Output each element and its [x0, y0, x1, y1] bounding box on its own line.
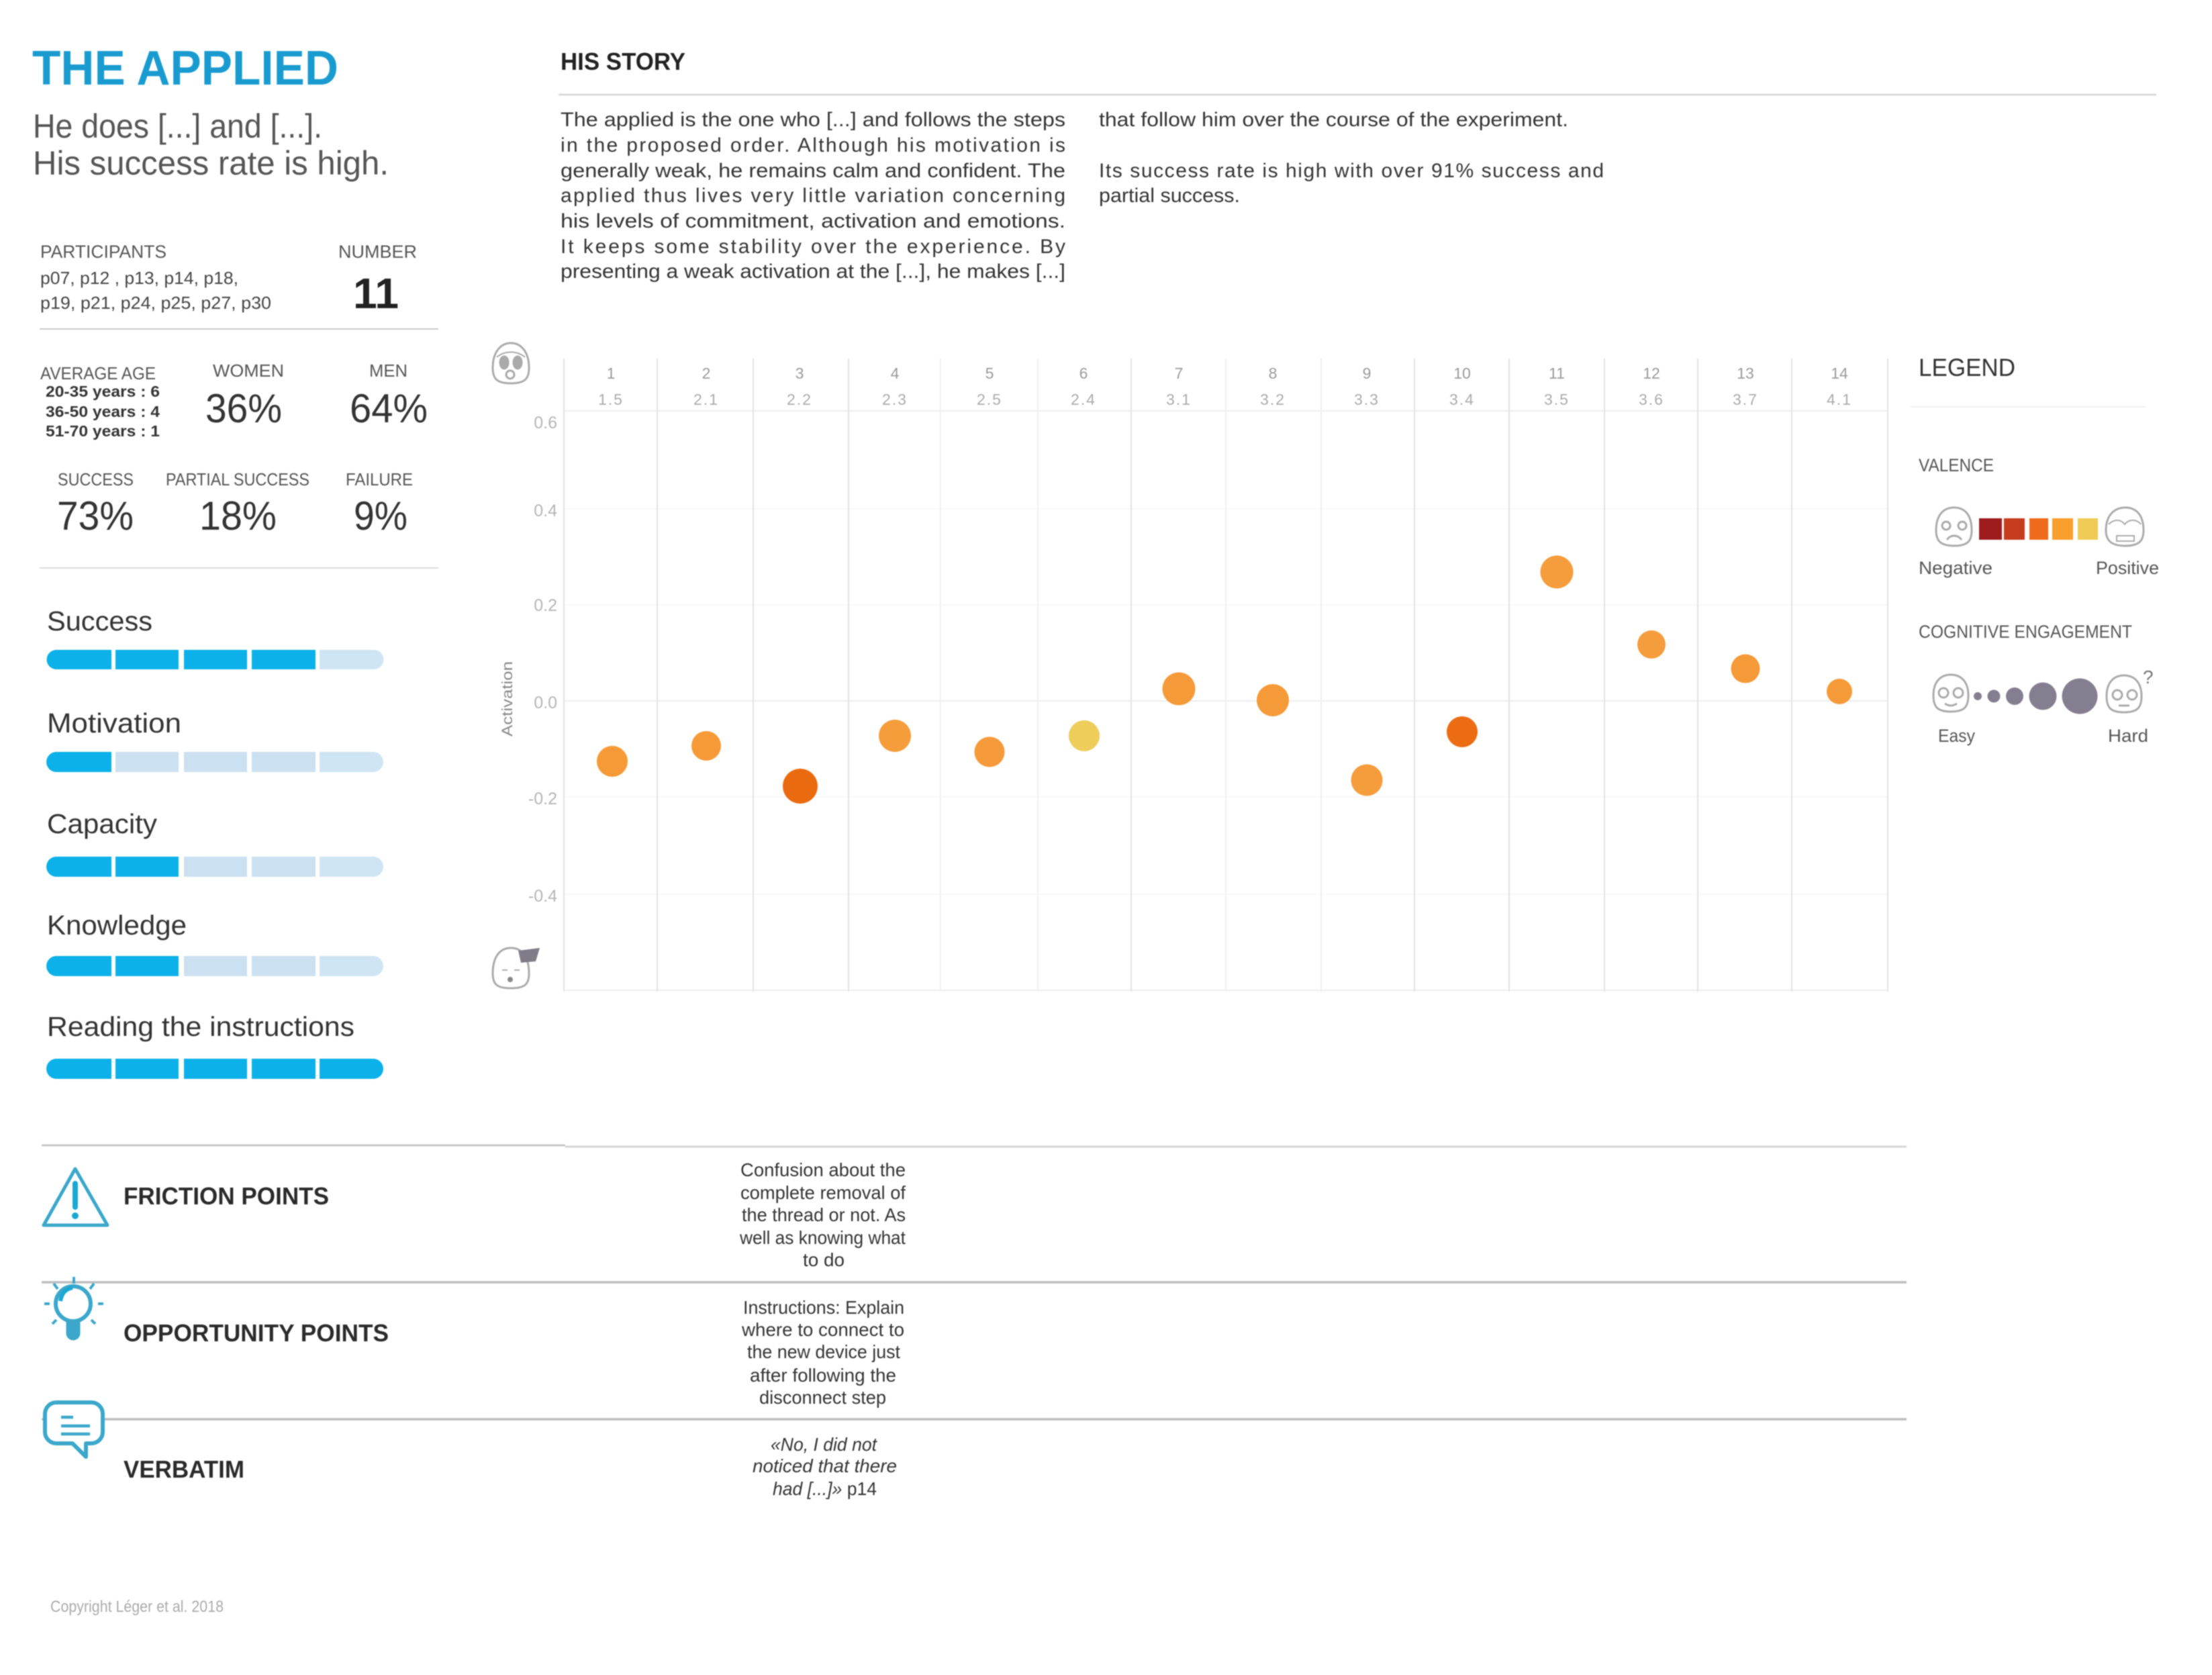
negative label: Negative — [1919, 558, 1992, 578]
step code labels: 4.1 — [1827, 391, 1852, 408]
bar: reading the instructions — [46, 1011, 383, 1079]
opportunity points heading: OPPORTUNITY POINTS — [124, 1319, 389, 1347]
step code labels: 2.1 — [693, 391, 719, 408]
friction points heading: FRICTION POINTS — [124, 1182, 329, 1210]
failure share: 9% — [354, 493, 407, 538]
bar: success — [47, 606, 384, 669]
step number labels: 7 — [1175, 365, 1183, 382]
copyright: Copyright Léger et al. 2018 — [50, 1598, 224, 1616]
text block: story: in the proposed order. Although his motivation is — [561, 134, 1065, 156]
y axis title: Activation — [499, 661, 516, 736]
step code labels: 2.4 — [1071, 391, 1096, 408]
icon: hard face: ? — [2143, 667, 2154, 687]
bar: motivation: Motivation — [47, 708, 181, 738]
y axis ticks: -0.2 — [528, 789, 557, 808]
step code labels: 2.3 — [882, 391, 908, 408]
panel: demographics — [40, 361, 428, 538]
data points — [597, 556, 1852, 804]
success share: SUCCESS — [58, 469, 134, 489]
opportunity points text: where to connect to — [741, 1319, 904, 1340]
friction points text: the thread or not. As — [742, 1204, 906, 1225]
participants list: p19, p21, p24, p25, p27, p30 — [40, 293, 271, 313]
icon: light bulb — [44, 1277, 103, 1339]
icon: warning triangle — [44, 1169, 107, 1225]
step code labels — [598, 391, 1852, 408]
bar: capacity: Capacity — [47, 808, 158, 839]
easy label: Easy — [1938, 726, 1975, 746]
icon: negative face — [1936, 508, 1972, 546]
heading: his story: HIS STORY — [561, 48, 685, 75]
text block: story: his levels of commitment, activation and emotions. — [561, 210, 1065, 232]
step number labels: 2 — [702, 365, 710, 382]
icon: excited face — [493, 343, 529, 383]
bar: knowledge — [46, 910, 383, 976]
friction points text: complete removal of — [740, 1182, 906, 1203]
participants list: p07, p12 , p13, p14, p18, — [40, 268, 238, 288]
step number labels: 4 — [891, 365, 900, 382]
icon: easy face — [1933, 675, 1968, 712]
success share: 73% — [57, 493, 134, 538]
partial success share: 18% — [199, 493, 277, 538]
step number labels: 6 — [1079, 365, 1088, 382]
icon: sleepy face — [493, 948, 540, 988]
row: verbatim — [45, 1402, 897, 1499]
failure share — [346, 469, 413, 538]
friction points text — [739, 1159, 906, 1270]
step code labels: 3.5 — [1544, 391, 1570, 408]
text block: story: partial success. — [1099, 185, 1240, 207]
friction points text: Confusion about the — [740, 1159, 906, 1180]
bar: capacity — [46, 808, 383, 877]
partial success share: PARTIAL SUCCESS — [166, 469, 309, 489]
text block: story: It keeps some stability over the experience. By — [561, 236, 1065, 258]
verbatim heading: VERBATIM — [124, 1455, 244, 1483]
valence scale — [1979, 518, 2098, 540]
step code labels: 3.7 — [1733, 391, 1758, 408]
y axis ticks — [528, 414, 557, 906]
legend heading: LEGEND — [1919, 354, 2015, 381]
age breakdown: 51-70 years : 1 — [46, 422, 160, 440]
women share — [205, 361, 284, 431]
opportunity points text: disconnect step — [759, 1387, 886, 1408]
chart: activation dot plot — [493, 343, 1888, 992]
women share: WOMEN — [213, 361, 284, 381]
text block: story: applied thus lives very little variation concerning — [561, 185, 1065, 207]
step code labels: 3.3 — [1354, 391, 1380, 408]
men share: 64% — [350, 386, 428, 431]
step code labels: 3.2 — [1260, 391, 1286, 408]
participants heading: PARTICIPANTS — [40, 242, 166, 262]
step code labels: 3.1 — [1166, 391, 1192, 408]
hard label: Hard — [2108, 726, 2148, 746]
valence heading: VALENCE — [1919, 455, 1994, 475]
step number labels: 5 — [985, 365, 994, 382]
text block: story — [561, 109, 1604, 283]
women share: 36% — [205, 386, 282, 431]
y axis ticks: 0.4 — [534, 501, 557, 520]
men share — [350, 361, 428, 431]
subtitle: His success rate is high. — [33, 144, 389, 182]
step code labels: 3.4 — [1449, 391, 1475, 408]
step code labels: 1.5 — [598, 391, 624, 408]
title: THE APPLIED — [32, 42, 338, 95]
step number labels: 11 — [1549, 365, 1565, 382]
verbatim quote: had [...]» p14 — [773, 1478, 877, 1499]
bar: reading the instructions: Reading the instructions — [47, 1011, 354, 1042]
opportunity points text: the new device just — [747, 1341, 900, 1362]
step number labels: 14 — [1831, 365, 1848, 382]
cognitive engagement heading: COGNITIVE ENGAGEMENT — [1919, 622, 2132, 642]
text block: story: generally weak, he remains calm and confident. The — [561, 160, 1065, 182]
step number labels: 1 — [607, 365, 615, 382]
participants list — [40, 268, 271, 313]
panel: legend — [1911, 354, 2159, 746]
partial success share — [166, 469, 309, 538]
age breakdown — [46, 383, 160, 440]
text block: story: Its success rate is high with over 91% success and — [1099, 160, 1604, 182]
bar: success: Success — [47, 606, 152, 636]
number value: 11 — [353, 269, 399, 318]
positive label: Positive — [2096, 558, 2159, 578]
step code labels: 2.2 — [787, 391, 812, 408]
text block: story: that follow him over the course of the experiment. — [1099, 109, 1568, 131]
age breakdown: 36-50 years : 4 — [46, 403, 160, 420]
friction points text: well as knowing what — [739, 1227, 906, 1248]
text block: story: The applied is the one who [...] and follows the steps — [561, 109, 1065, 131]
step code labels: 2.5 — [977, 391, 1002, 408]
opportunity points text: after following the — [750, 1365, 896, 1386]
subtitle: He does [...] and [...]. — [33, 107, 322, 145]
men share: MEN — [369, 361, 407, 381]
opportunity points text — [741, 1297, 904, 1408]
y axis ticks: 0.2 — [534, 596, 557, 615]
icon: positive face — [2106, 508, 2144, 546]
row: friction points — [44, 1159, 906, 1270]
step number labels: 13 — [1737, 365, 1754, 382]
verbatim quote: noticed that there — [753, 1455, 897, 1476]
y axis ticks: 0.6 — [534, 414, 557, 432]
verbatim quote: «No, I did not — [771, 1434, 877, 1455]
failure share: FAILURE — [346, 469, 413, 489]
bar: knowledge: Knowledge — [47, 910, 187, 941]
step number labels: 9 — [1363, 365, 1371, 382]
panel: skill bars — [46, 606, 384, 1079]
icon: speech bubble — [45, 1402, 103, 1457]
opportunity points text: Instructions: Explain — [743, 1297, 904, 1318]
step code labels: 3.6 — [1639, 391, 1664, 408]
y axis ticks: 0.0 — [534, 693, 557, 712]
step number labels: 8 — [1269, 365, 1277, 382]
age breakdown: 20-35 years : 6 — [46, 383, 160, 400]
subtitle — [33, 107, 389, 182]
text block: story: presenting a weak activation at the [...], he makes [...] — [561, 260, 1065, 283]
step number labels: 3 — [796, 365, 804, 382]
row: opportunity points — [44, 1277, 904, 1408]
icon: hard face — [2107, 667, 2154, 712]
number heading: NUMBER — [338, 242, 417, 262]
cognitive engagement scale — [1974, 678, 2097, 714]
success share — [57, 469, 134, 538]
step number labels: 10 — [1453, 365, 1471, 382]
step number labels: 12 — [1643, 365, 1660, 382]
panel: participants — [40, 242, 417, 318]
friction points text: to do — [803, 1249, 845, 1270]
y axis ticks: -0.4 — [528, 887, 557, 906]
verbatim quote — [753, 1434, 897, 1499]
step number labels — [607, 365, 1848, 382]
average age heading: AVERAGE AGE — [40, 363, 156, 383]
chart grid — [564, 358, 1888, 992]
bar: motivation — [46, 708, 383, 772]
